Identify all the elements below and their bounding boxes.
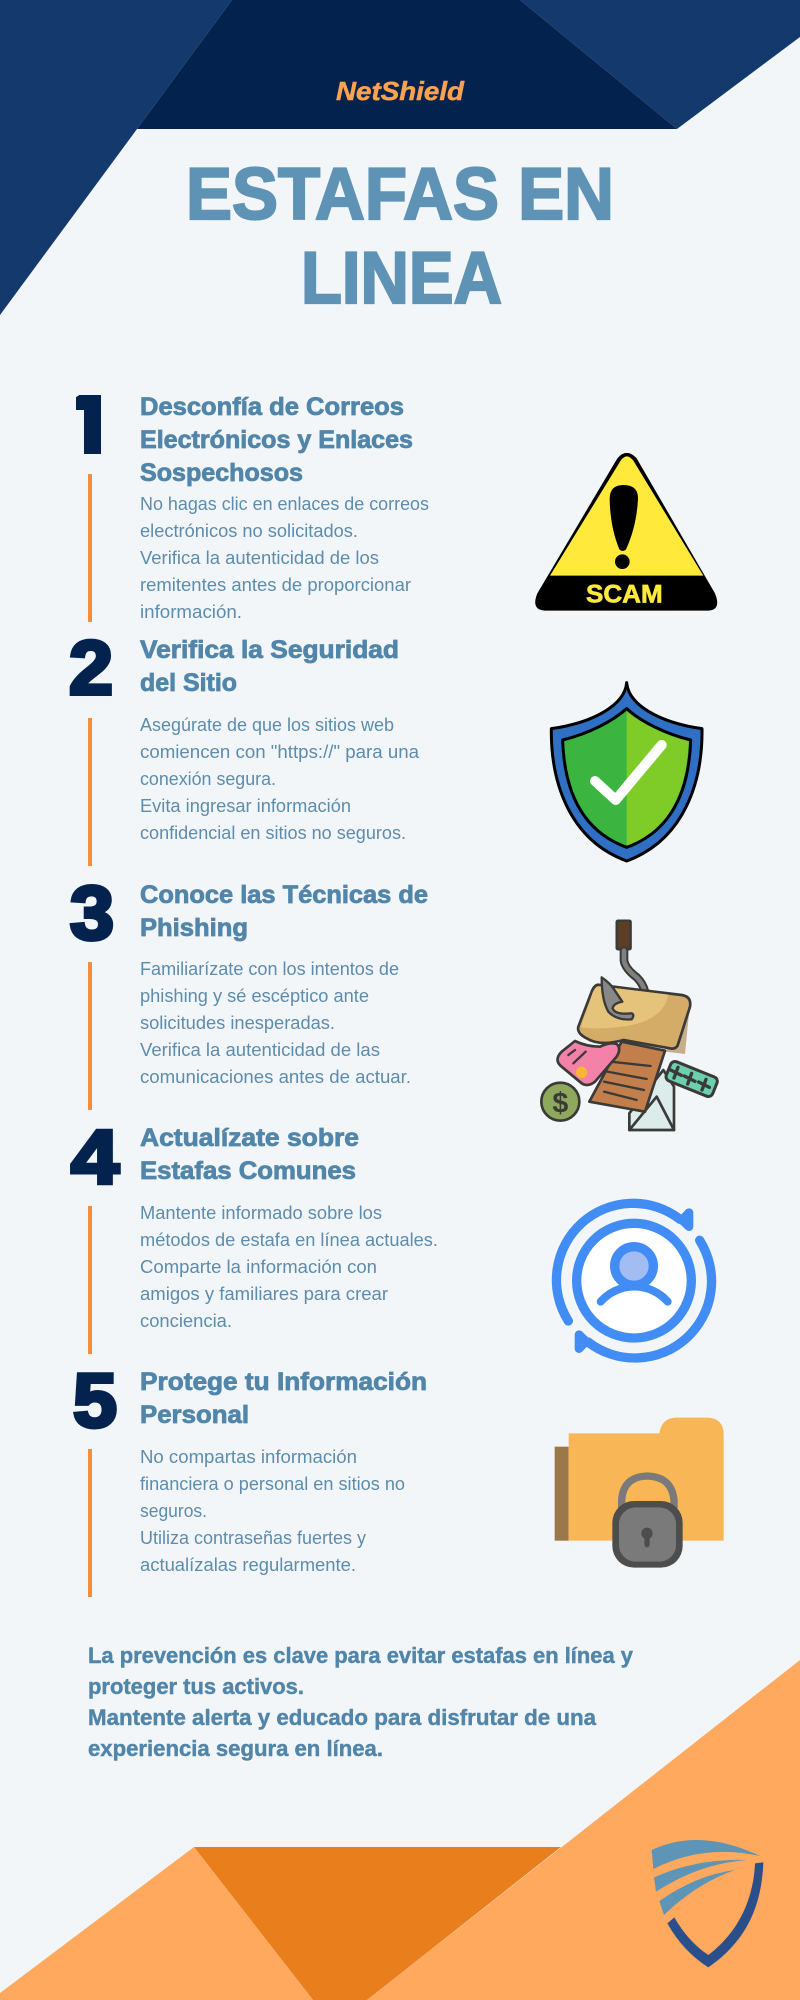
icon: locked folder <box>555 1418 724 1568</box>
heading 2: del Sitio <box>140 669 237 697</box>
heading 2: Verifica la Seguridad <box>140 636 399 664</box>
icon: user update <box>556 1203 712 1358</box>
bar 4 <box>88 1206 92 1354</box>
closing message: Mantente alerta y educado para disfrutar de una <box>88 1705 597 1730</box>
closing message: La prevención es clave para evitar estafas en línea y <box>88 1643 634 1668</box>
heading 4 <box>140 1124 359 1185</box>
heading 1: Sospechosos <box>140 459 303 487</box>
icon: phishing hook <box>541 921 719 1130</box>
bar 3 <box>88 962 92 1110</box>
panel: step 3 <box>70 871 719 1130</box>
heading 4: Actualízate sobre <box>140 1124 359 1152</box>
title <box>186 154 614 319</box>
body 5: No compartas información <box>140 1447 357 1467</box>
body 4: Mantente informado sobre los <box>140 1203 382 1223</box>
heading 3 <box>140 881 428 942</box>
heading 5: Personal <box>140 1401 249 1429</box>
body 5: financiera o personal en sitios no <box>140 1474 405 1494</box>
body 4: métodos de estafa en línea actuales. <box>140 1230 438 1250</box>
body 2: Evita ingresar información <box>140 796 351 816</box>
body 4: amigos y familiares para crear <box>140 1284 388 1304</box>
number 1: 1 <box>68 378 115 472</box>
heading 3: Conoce las Técnicas de <box>140 881 428 909</box>
body 4: Comparte la información con <box>140 1257 377 1277</box>
body 3: phishing y sé escéptico ante <box>140 986 369 1006</box>
body 5 <box>140 1447 405 1575</box>
heading 1: Electrónicos y Enlaces <box>140 426 413 454</box>
heading 4: Estafas Comunes <box>140 1157 356 1185</box>
body 1 <box>140 494 429 622</box>
heading 5 <box>140 1368 427 1429</box>
body 3: comunicaciones antes de actuar. <box>140 1067 411 1087</box>
icon: scam warning triangle: SCAM <box>586 581 663 609</box>
number 4: 4 <box>71 1115 119 1200</box>
body 3: Verifica la autenticidad de las <box>140 1040 380 1060</box>
body 3 <box>140 959 411 1087</box>
panel: step 4 <box>71 1115 712 1358</box>
heading 1 <box>140 393 413 487</box>
body 4: conciencia. <box>140 1311 232 1331</box>
panel: step 1 <box>68 378 717 622</box>
body 2: comiencen con "https://" para una <box>140 742 420 762</box>
bar 5 <box>88 1449 92 1597</box>
title: LINEA <box>301 238 502 319</box>
body 1: información. <box>140 602 242 622</box>
bar 1 <box>88 474 92 622</box>
heading 5: Protege tu Información <box>140 1368 427 1396</box>
body 2 <box>140 715 420 843</box>
bar 2 <box>88 718 92 866</box>
brand name: NetShield <box>336 76 465 106</box>
heading 2 <box>140 636 399 697</box>
number 5: 5 <box>73 1359 117 1444</box>
icon: phishing hook: $ <box>552 1087 568 1119</box>
body 5: seguros. <box>140 1501 207 1521</box>
heading 3: Phishing <box>140 914 248 942</box>
closing message <box>88 1643 634 1761</box>
body 3: solicitudes inesperadas. <box>140 1013 335 1033</box>
body 5: actualízalas regularmente. <box>140 1555 356 1575</box>
body 2: conexión segura. <box>140 769 276 789</box>
closing message: proteger tus activos. <box>88 1674 304 1699</box>
body 3: Familiarízate con los intentos de <box>140 959 399 979</box>
number 3: 3 <box>70 871 114 956</box>
body 1: Verifica la autenticidad de los <box>140 548 379 568</box>
body 1: No hagas clic en enlaces de correos <box>140 494 429 514</box>
body 2: Asegúrate de que los sitios web <box>140 715 394 735</box>
body 4 <box>140 1203 438 1331</box>
footer shapes <box>0 1660 800 2000</box>
closing message: experiencia segura en línea. <box>88 1736 383 1761</box>
title: ESTAFAS EN <box>186 154 614 235</box>
icon: scam warning triangle <box>535 453 717 611</box>
header shapes <box>0 0 800 315</box>
body 1: electrónicos no solicitados. <box>140 521 358 541</box>
body 5: Utiliza contraseñas fuertes y <box>140 1528 366 1548</box>
icon: security shield <box>551 683 702 861</box>
body 2: confidencial en sitios no seguros. <box>140 823 406 843</box>
body 1: remitentes antes de proporcionar <box>140 575 411 595</box>
number 2: 2 <box>69 626 113 711</box>
icon: shield logo <box>652 1840 763 1967</box>
panel: step 2 <box>69 626 702 866</box>
panel: step 5 <box>73 1359 724 1597</box>
heading 1: Desconfía de Correos <box>140 393 404 421</box>
